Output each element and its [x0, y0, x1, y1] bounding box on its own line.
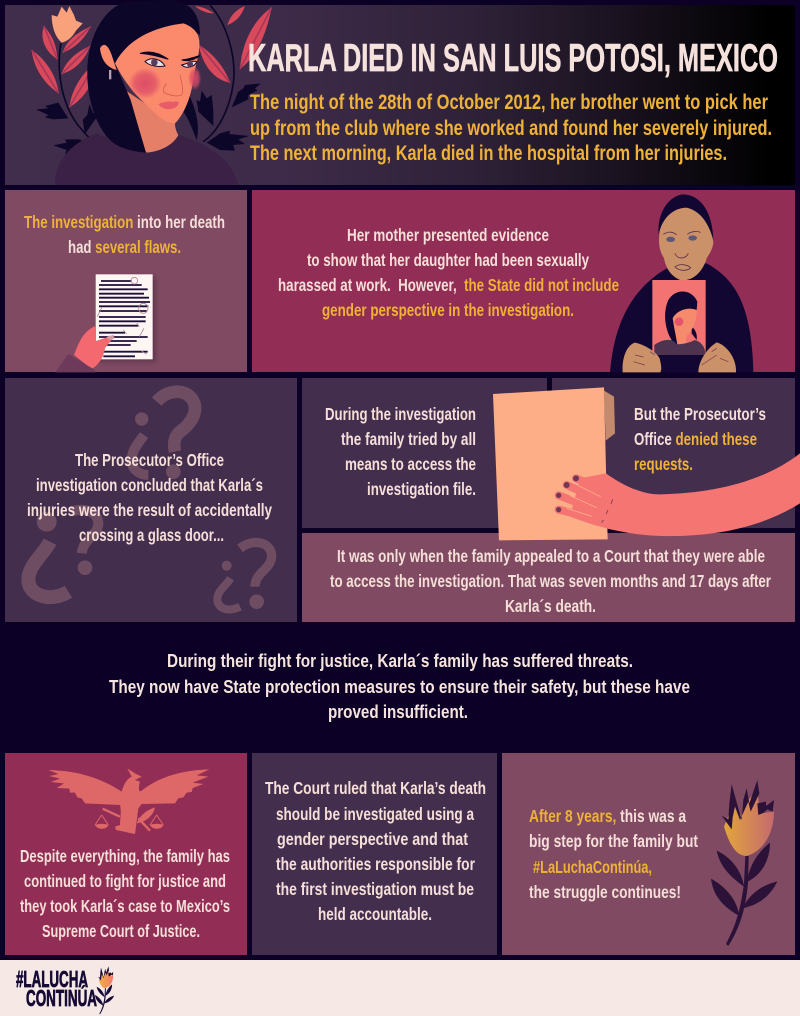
- text: family sought file: During the investigation: [325, 404, 476, 424]
- text: supreme court: Despite everything, the family has: [20, 846, 230, 866]
- text: struggle continues: the struggle continues!: [529, 882, 681, 902]
- text: threats and protection: proved insufficient.: [328, 701, 468, 722]
- text: supreme court: [20, 846, 230, 941]
- panel: mother's evidence: [252, 190, 795, 372]
- illustration: Karla portrait with wreath: [32, 0, 272, 185]
- panel: prosecutor's conclusion: [5, 378, 297, 622]
- text: requests denied: Office denied these: [634, 429, 757, 449]
- text: prosecutor's conclusion: [27, 450, 272, 545]
- text: court ruling: gender perspective and that: [277, 829, 468, 849]
- text: investigation flaws: had several flaws.: [68, 237, 181, 257]
- text: court ruling: the first investigation must be: [276, 879, 474, 899]
- text: family sought file: the family tried by all: [341, 429, 476, 449]
- text: court appeal: [330, 546, 771, 616]
- logo: #LaLucha Continúa: CONTINÚA: [26, 984, 97, 1011]
- panel: court ruling: [252, 753, 497, 955]
- icons: question marks: [28, 392, 272, 609]
- text: struggle continues: After 8 years, this was a: [529, 806, 686, 826]
- panel: struggle continues: [502, 753, 795, 955]
- text: threats and protection: [109, 650, 690, 722]
- text: court ruling: [265, 778, 486, 924]
- text: struggle continues: [529, 806, 698, 902]
- text: requests denied: [634, 404, 766, 474]
- text: prosecutor's conclusion: crossing a glass door...: [79, 525, 224, 545]
- text: mother's evidence: to show that her daughter had been sexually: [307, 250, 589, 270]
- intro text: [250, 91, 772, 165]
- panel: court appeal: [302, 533, 795, 622]
- text: court ruling: The Court ruled that Karla’s death: [265, 778, 486, 798]
- text: court ruling: held accountable.: [318, 904, 432, 924]
- text: mother's evidence: Her mother presented evidence: [347, 225, 549, 245]
- text: prosecutor's conclusion: injuries were the result of accidentally: [27, 500, 272, 520]
- icon: logo flower: [95, 966, 114, 1014]
- panel: requests denied: [552, 378, 795, 528]
- text: family sought file: [325, 404, 476, 499]
- illustration: arm holding folder: [493, 387, 800, 540]
- text: requests denied: requests.: [634, 454, 693, 474]
- panel: supreme court: [5, 753, 247, 955]
- logo: #LaLucha Continúa: #LALUCHA: [16, 966, 88, 992]
- text: threats and protection: During their fight for justice, Karla´s family has suffered threats.: [167, 650, 633, 671]
- panel: family sought file: [302, 378, 547, 528]
- text: court ruling: should be investigated using a: [276, 804, 474, 824]
- logo: #LaLucha Continúa: [16, 966, 114, 1014]
- text: supreme court: they took Karla´s case to Mexico’s: [20, 896, 230, 916]
- text: investigation flaws: [24, 212, 225, 257]
- illustration: mother holding photo: [610, 194, 753, 372]
- text: court appeal: Karla´s death.: [505, 596, 596, 616]
- text: prosecutor's conclusion: The Prosecutor’s Office: [75, 450, 224, 470]
- footer band: [0, 960, 800, 1016]
- text: court ruling: the authorities responsible for: [276, 854, 475, 874]
- text: struggle continues: big step for the family but: [529, 831, 698, 851]
- text: family sought file: means to access the: [345, 454, 476, 474]
- icon: marked document in hand: [55, 274, 156, 372]
- panel: investigation flaws: [5, 190, 247, 372]
- text: mother's evidence: harassed at work. However, the State did not include: [278, 275, 619, 295]
- text: threats and protection: They now have State protection measures to ensure their safety, but these have: [109, 676, 690, 697]
- icon: flower: [711, 780, 777, 946]
- text: supreme court: continued to fight for justice and: [24, 871, 226, 891]
- text: family sought file: investigation file.: [367, 479, 476, 499]
- icon: eagle with scales: [48, 768, 209, 834]
- text: prosecutor's conclusion: investigation concluded that Karla´s: [36, 475, 263, 495]
- panel: header: [5, 0, 795, 185]
- text: mother's evidence: [278, 225, 619, 320]
- text: struggle continues: #LaLuchaContinúa,: [533, 857, 652, 877]
- text: mother's evidence: gender perspective in the investigation.: [322, 300, 574, 320]
- text: supreme court: Supreme Court of Justice.: [42, 921, 200, 941]
- text: investigation flaws: The investigation into her death: [24, 212, 225, 232]
